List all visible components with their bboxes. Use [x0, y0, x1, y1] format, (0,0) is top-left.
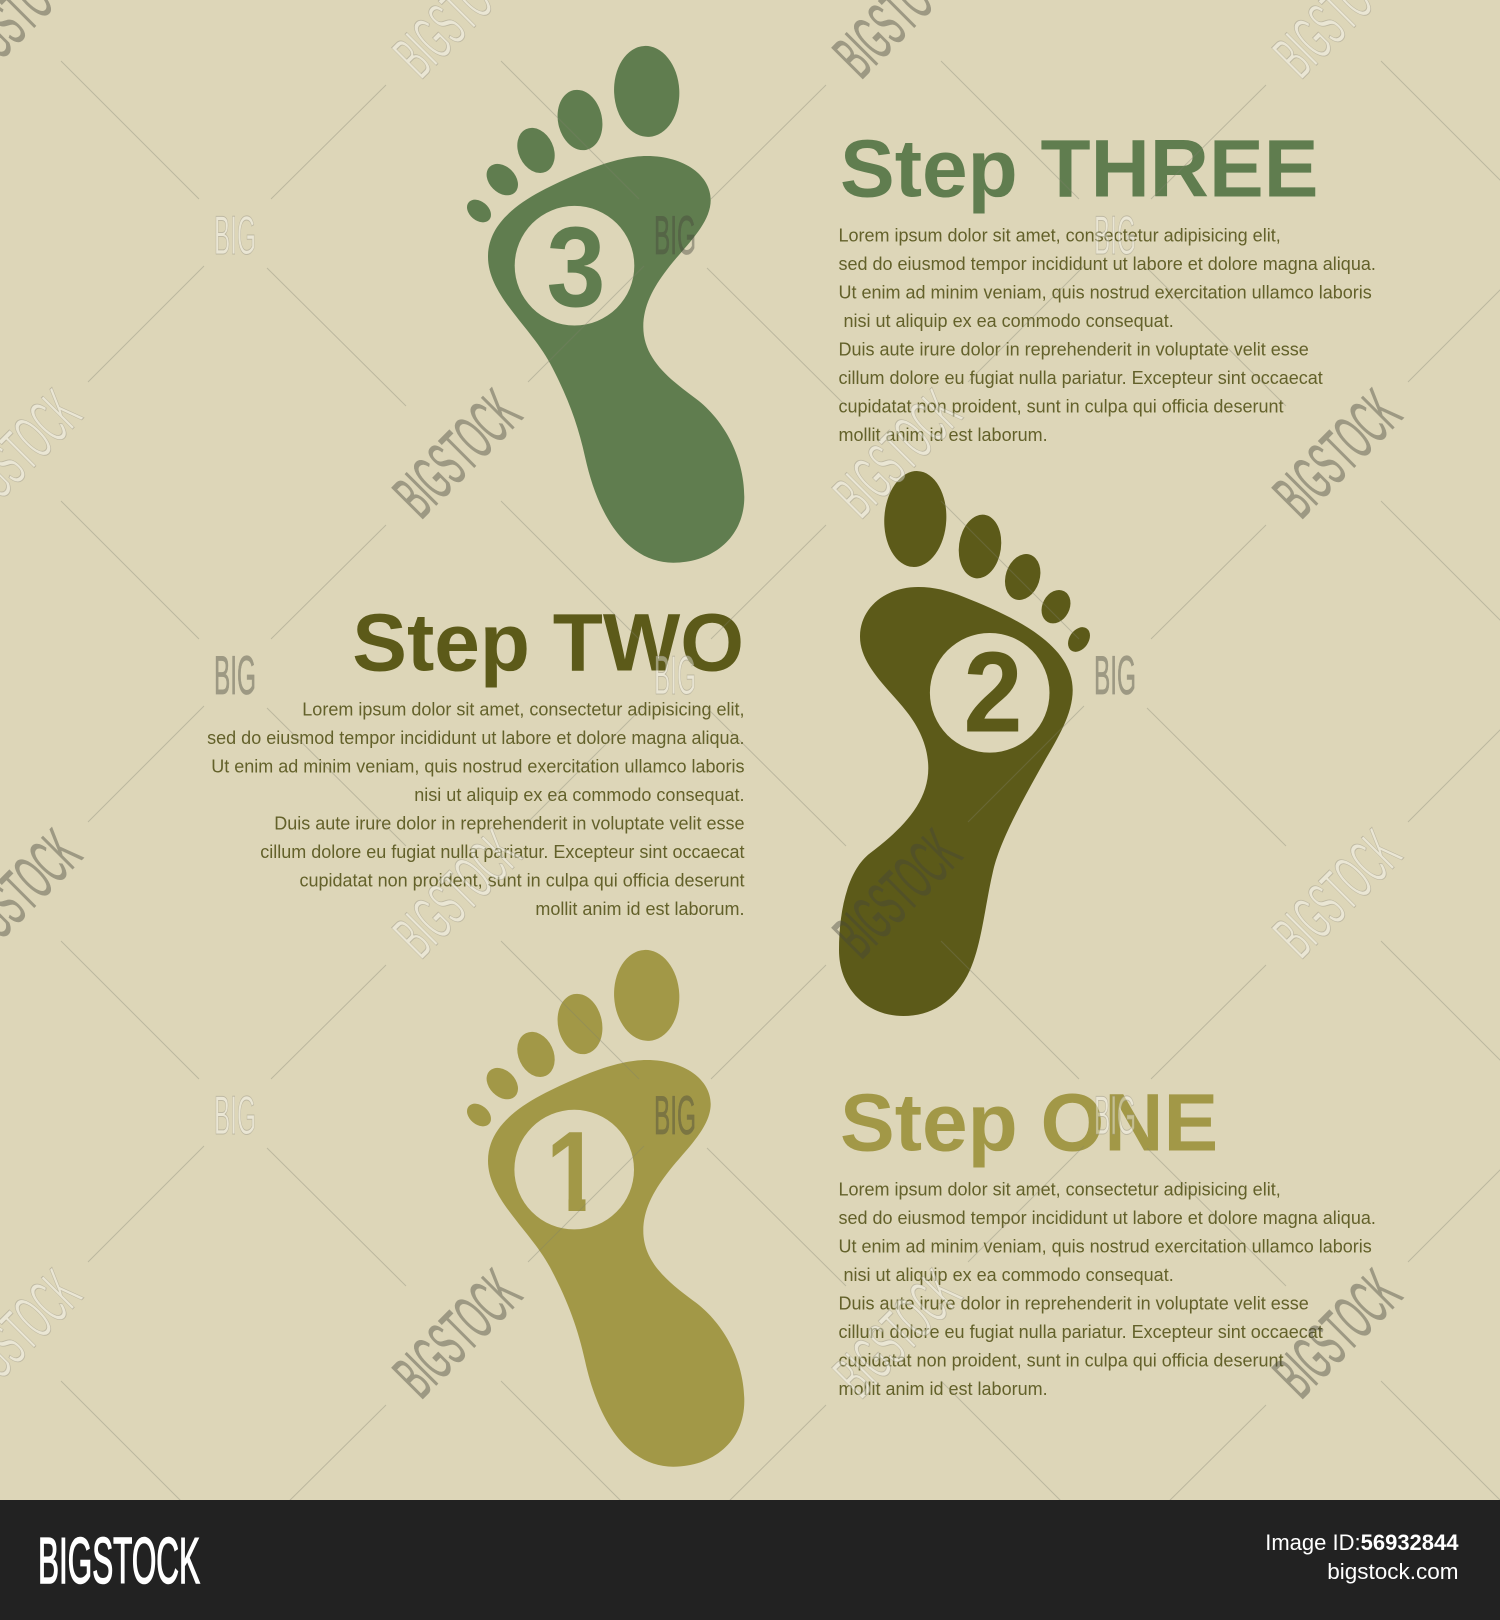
text block: step two: mollit anim id est laborum. [535, 899, 744, 919]
text block: step three: sed do eiusmod tempor incididunt ut labore et dolore magna aliqua. [838, 254, 1376, 274]
text block: step three: cillum dolore eu fugiat nulla pariatur. Excepteur sint occaecat [838, 368, 1323, 388]
text block: step one: cupidatat non proident, sunt in culpa qui officia deserunt [838, 1350, 1283, 1370]
watermark: BIGSTOCK diagonal marks: BIGSTOCK [380, 816, 534, 971]
text block: step one: sed do eiusmod tempor incididunt ut labore et dolore magna aliqua. [838, 1208, 1376, 1228]
watermark: BIGSTOCK diagonal marks: BIGSTOCK [380, 376, 534, 531]
site url: bigstock.com [1327, 1559, 1458, 1584]
footprint 2 [839, 469, 1095, 1016]
text block: step two [207, 700, 744, 919]
footprint 3: 3 [547, 203, 605, 331]
watermark: BIGSTOCK diagonal marks: BIGSTOCK [820, 376, 974, 531]
image id: Image ID:56932844 [1265, 1530, 1459, 1555]
text block: step three: mollit anim id est laborum. [838, 425, 1048, 445]
watermark: BIGSTOCK diagonal marks: BIGSTOCK [820, 816, 974, 971]
text block: step two: nisi ut aliquip ex ea commodo consequat. [414, 785, 744, 805]
watermark: BIG marks: BIG [654, 1084, 696, 1146]
text block: step two: Ut enim ad minim veniam, quis nostrud exercitation ullamco laboris [211, 757, 744, 777]
text block: step one: cillum dolore eu fugiat nulla pariatur. Excepteur sint occaecat [838, 1322, 1323, 1342]
heading: step three: Step THREE [840, 124, 1318, 215]
text block: step one: Lorem ipsum dolor sit amet, consectetur adipisicing elit, [838, 1179, 1281, 1199]
watermark: BIG marks: BIG [214, 204, 256, 266]
text block: step three: Ut enim ad minim veniam, quis nostrud exercitation ullamco laboris [838, 283, 1372, 303]
watermark: BIGSTOCK diagonal marks: BIGSTOCK [380, 1256, 534, 1411]
text block: step one: nisi ut aliquip ex ea commodo consequat. [844, 1265, 1174, 1285]
footprint 2: 2 [964, 629, 1022, 757]
text: BIG [1094, 1084, 1136, 1146]
text block: step one: Ut enim ad minim veniam, quis nostrud exercitation ullamco laboris [838, 1236, 1372, 1256]
watermark: BIG marks: BIG [654, 644, 696, 706]
watermark: BIG marks [214, 204, 1136, 1146]
text block: step three [838, 226, 1376, 445]
text block: step one: mollit anim id est laborum. [838, 1379, 1048, 1399]
text: BIG [1094, 644, 1136, 706]
footer bar: BIGSTOCK [38, 1524, 200, 1597]
watermark: BIG marks: BIG [214, 644, 256, 706]
text block: step three: Duis aute irure dolor in reprehenderit in voluptate velit esse [838, 340, 1309, 360]
text block: step one [838, 1179, 1376, 1399]
footprint 3 [463, 44, 744, 563]
text block: step three: nisi ut aliquip ex ea commodo consequat. [844, 311, 1174, 331]
text block: step one: Duis aute irure dolor in reprehenderit in voluptate velit esse [838, 1293, 1309, 1313]
text block: step two: Duis aute irure dolor in reprehenderit in voluptate velit esse [274, 814, 744, 834]
text: BIG [1094, 204, 1136, 266]
watermark: BIG marks: BIG [654, 204, 696, 266]
text block: step three: Lorem ipsum dolor sit amet, consectetur adipisicing elit, [838, 226, 1281, 246]
footprint 1 [463, 948, 744, 1467]
footer bar [0, 1500, 1500, 1620]
heading: step two: Step TWO [352, 598, 744, 689]
watermark: BIGSTOCK diagonal marks: BIGSTOCK [820, 1256, 974, 1411]
heading: step one: Step ONE [840, 1077, 1218, 1168]
text block: step two: cillum dolore eu fugiat nulla pariatur. Excepteur sint occaecat [260, 842, 744, 862]
text block: step two: cupidatat non proident, sunt in culpa qui officia deserunt [300, 871, 744, 891]
text block: step two: sed do eiusmod tempor incididunt ut labore et dolore magna aliqua. [207, 728, 744, 748]
text block: step two: Lorem ipsum dolor sit amet, consectetur adipisicing elit, [302, 700, 744, 720]
footprint 1: 1 [546, 1109, 600, 1236]
watermark: BIG marks: BIG [214, 1084, 256, 1146]
text block: step three: cupidatat non proident, sunt in culpa qui officia deserunt [838, 397, 1283, 417]
